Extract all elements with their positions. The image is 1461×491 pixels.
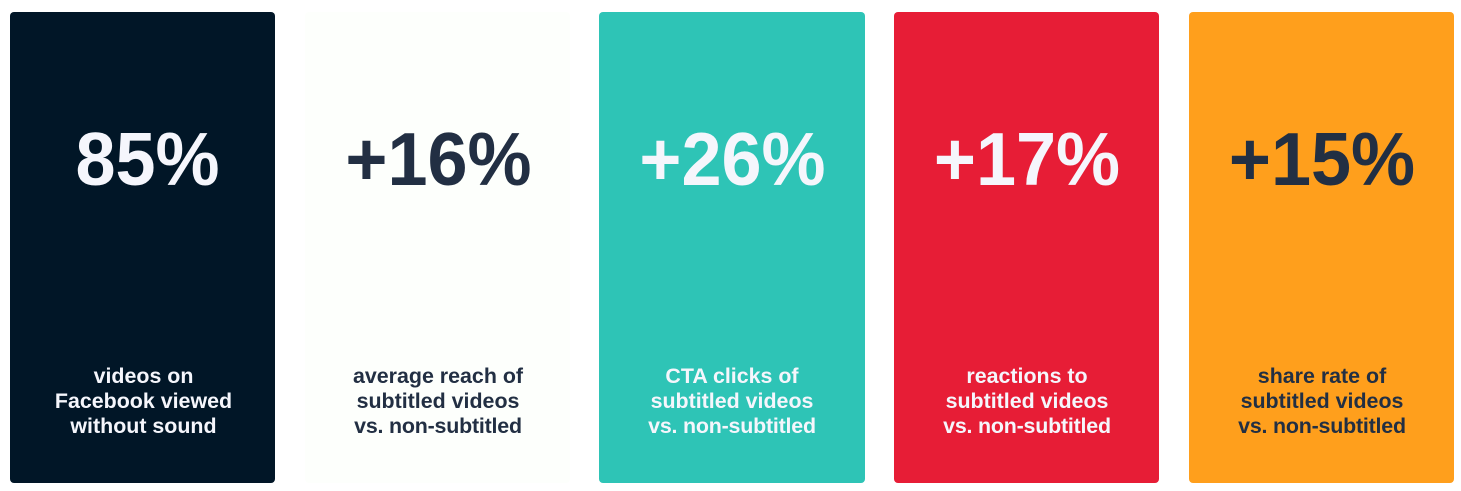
statistic: +17%: +17% bbox=[934, 118, 1120, 202]
statistic: +15%: +15% bbox=[1229, 118, 1415, 202]
label: CTA clicks bbox=[648, 364, 816, 438]
label: share rate bbox=[1238, 364, 1406, 438]
label: average reach: average reach of bbox=[353, 364, 523, 388]
label: average reach: subtitled videos bbox=[357, 389, 519, 413]
panel: +16% average reach bbox=[305, 12, 570, 483]
label: CTA clicks: vs. non-subtitled bbox=[648, 414, 816, 438]
label: average reach bbox=[353, 364, 524, 438]
label: share rate: subtitled videos bbox=[1241, 389, 1403, 413]
statistic: +16%: +16% bbox=[345, 118, 532, 202]
label: CTA clicks: CTA clicks of bbox=[665, 364, 799, 388]
label: videos on Facebook viewed without sound: without sound bbox=[70, 414, 217, 438]
label: share rate: vs. non-subtitled bbox=[1238, 414, 1406, 438]
label: videos on Facebook viewed without sound bbox=[55, 364, 232, 438]
label: CTA clicks: subtitled videos bbox=[651, 389, 813, 413]
label: videos on Facebook viewed without sound: Facebook viewed bbox=[55, 389, 232, 413]
panel: +26% CTA clicks bbox=[599, 12, 865, 483]
panel: +15% share rate bbox=[1189, 12, 1454, 483]
label: average reach: vs. non-subtitled bbox=[354, 414, 522, 438]
label: videos on Facebook viewed without sound: videos on bbox=[94, 364, 193, 388]
panel: 85% videos without sound bbox=[10, 12, 275, 483]
statistic: +26%: +26% bbox=[639, 118, 826, 202]
label: reactions: subtitled videos bbox=[946, 389, 1108, 413]
label: reactions: vs. non-subtitled bbox=[943, 414, 1111, 438]
panel: +17% reactions bbox=[894, 12, 1159, 483]
label: reactions: reactions to bbox=[966, 364, 1088, 388]
label: share rate: share rate of bbox=[1258, 364, 1386, 388]
statistic: 85%: 85% bbox=[75, 118, 220, 202]
label: reactions bbox=[943, 364, 1111, 438]
